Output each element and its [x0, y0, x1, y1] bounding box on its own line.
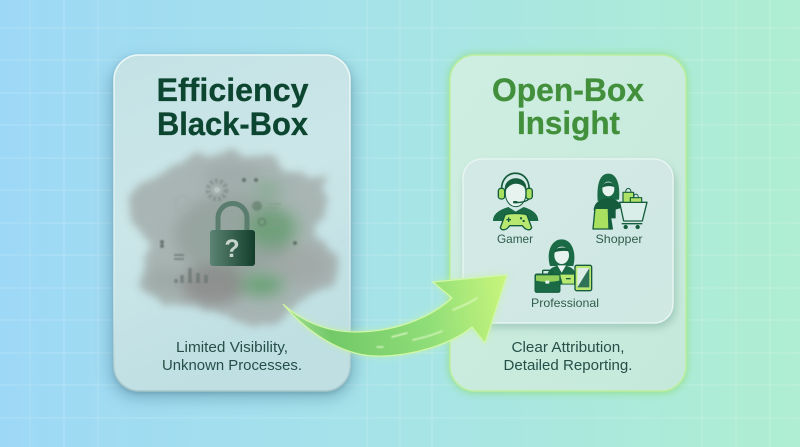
heading line two: Black-Box — [157, 106, 308, 142]
arrow: black-box to open-box — [283, 275, 507, 356]
arrow highlights — [377, 298, 477, 347]
caption: limited visibility — [162, 339, 302, 374]
panel: open-box insight — [449, 54, 687, 393]
icon: gamer — [493, 173, 538, 230]
icon: padlock with question mark: ? — [224, 235, 240, 263]
inner card: personas — [463, 159, 676, 328]
caption: limited visibility: Unknown Processes. — [162, 357, 302, 374]
label: Gamer: Gamer — [497, 232, 533, 246]
caption: limited visibility: Limited Visibility, — [176, 339, 288, 356]
caption: clear attribution — [504, 339, 632, 374]
label: Professional: Professional — [531, 296, 599, 310]
caption: clear attribution: Clear Attribution, — [512, 339, 624, 356]
label: Shopper: Shopper — [596, 232, 642, 246]
heading line two: Insight — [517, 105, 620, 141]
icon: professional — [535, 239, 592, 292]
faded icons behind cloud — [160, 178, 297, 283]
heading: Efficiency Black-Box: Efficiency — [156, 72, 309, 108]
panel: efficiency black-box — [110, 55, 354, 398]
icon: shopper — [593, 174, 647, 229]
heading: Open-Box Insight: Open-Box — [492, 72, 644, 108]
caption: clear attribution: Detailed Reporting. — [504, 357, 632, 374]
cloud obscuring processes — [128, 153, 339, 325]
icon: padlock with question mark — [210, 204, 255, 266]
